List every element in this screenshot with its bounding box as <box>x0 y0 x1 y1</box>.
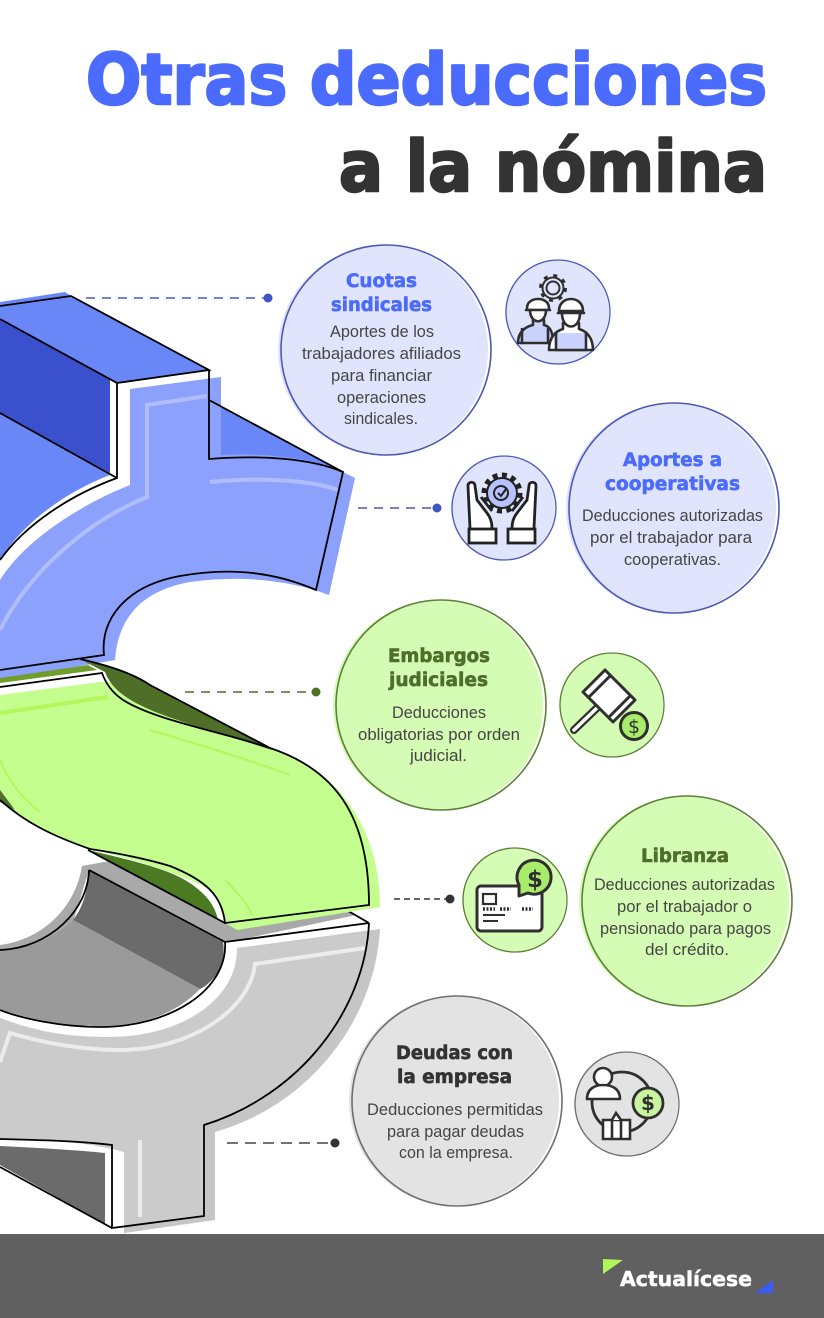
text: aportes a cooperativas <box>582 506 763 569</box>
text: deudas con la empresa: Deducciones permitidas <box>367 1100 543 1119</box>
heading: deudas con la empresa: la empresa <box>397 1067 512 1088</box>
text: deudas con la empresa: con la empresa. <box>399 1143 513 1162</box>
connector: aportes a cooperativas <box>358 504 442 512</box>
text: cuotas sindicales: Aportes de los <box>330 322 434 341</box>
panel: libranza <box>579 796 792 1006</box>
text: cuotas sindicales: trabajadores afiliados <box>302 344 461 363</box>
text: cuotas sindicales: operaciones <box>337 388 426 407</box>
heading: libranza: Libranza <box>641 846 729 867</box>
dollar: gray lower section <box>0 860 380 1233</box>
icon: gavel and coin: $ <box>628 716 640 738</box>
dollar: green middle section <box>0 659 380 930</box>
dollar sign illustration <box>0 292 380 1233</box>
heading: aportes a cooperativas: Aportes a <box>623 450 722 471</box>
logo: Actualícese: Actualícese <box>620 1267 752 1291</box>
text: embargos judiciales: judicial. <box>409 746 467 765</box>
text: libranza: Deducciones autorizadas <box>594 875 775 894</box>
icon: credit card with speech bubble: $ <box>527 867 543 893</box>
text: libranza: del crédito. <box>645 940 729 959</box>
panel: cuotas sindicales <box>278 245 491 455</box>
text: embargos judiciales: obligatorias por orden <box>358 725 520 744</box>
text: embargos judiciales: Deducciones <box>392 703 486 722</box>
icon: person, coin and briefcase <box>574 1052 679 1156</box>
icon: gavel and coin <box>559 653 664 757</box>
panel: embargos judiciales <box>333 600 546 810</box>
icon: hands holding gear <box>451 456 556 560</box>
connector: embargos judiciales <box>185 688 320 696</box>
connector: deudas con la empresa <box>227 1138 340 1148</box>
title: a la nómina <box>339 126 767 208</box>
heading: deudas con la empresa: Deudas con <box>396 1043 513 1064</box>
panel: aportes a cooperativas <box>566 403 779 613</box>
text: aportes a cooperativas: Deducciones autorizadas <box>582 506 763 525</box>
text: cuotas sindicales: sindicales. <box>344 409 418 428</box>
heading: aportes a cooperativas <box>605 450 740 495</box>
heading: embargos judiciales <box>388 646 490 691</box>
panel: deudas con la empresa <box>349 996 562 1206</box>
logo: Actualícese <box>603 1259 773 1293</box>
text: deudas con la empresa: para pagar deudas <box>387 1122 524 1141</box>
connector: cuotas sindicales <box>86 294 272 302</box>
text: cuotas sindicales <box>302 322 461 428</box>
footer bar <box>0 1234 824 1318</box>
text: libranza: por el trabajador o <box>617 897 752 916</box>
title: Otras deducciones <box>86 39 767 121</box>
text: embargos judiciales <box>358 703 520 765</box>
connector: libranza <box>394 894 454 904</box>
text: libranza <box>594 875 775 959</box>
text: deudas con la empresa <box>367 1100 543 1162</box>
heading: deudas con la empresa <box>396 1043 513 1088</box>
heading: embargos judiciales: Embargos <box>388 646 490 667</box>
title <box>86 39 767 208</box>
text: aportes a cooperativas: por el trabajador para <box>590 528 753 547</box>
dollar: blue upper section <box>0 292 355 680</box>
icon: credit card with speech bubble <box>462 848 567 952</box>
heading: cuotas sindicales <box>331 271 432 316</box>
heading: cuotas sindicales: Cuotas <box>346 271 417 292</box>
text: libranza: pensionado para pagos <box>600 919 771 938</box>
heading: aportes a cooperativas: cooperativas <box>605 474 740 495</box>
heading: embargos judiciales: judiciales <box>388 670 488 691</box>
text: aportes a cooperativas: cooperativas. <box>624 550 721 569</box>
icon: workers and gear <box>505 260 610 364</box>
heading: cuotas sindicales: sindicales <box>331 295 432 316</box>
icon: person, coin and briefcase: $ <box>641 1091 655 1115</box>
text: cuotas sindicales: para financiar <box>331 366 432 385</box>
